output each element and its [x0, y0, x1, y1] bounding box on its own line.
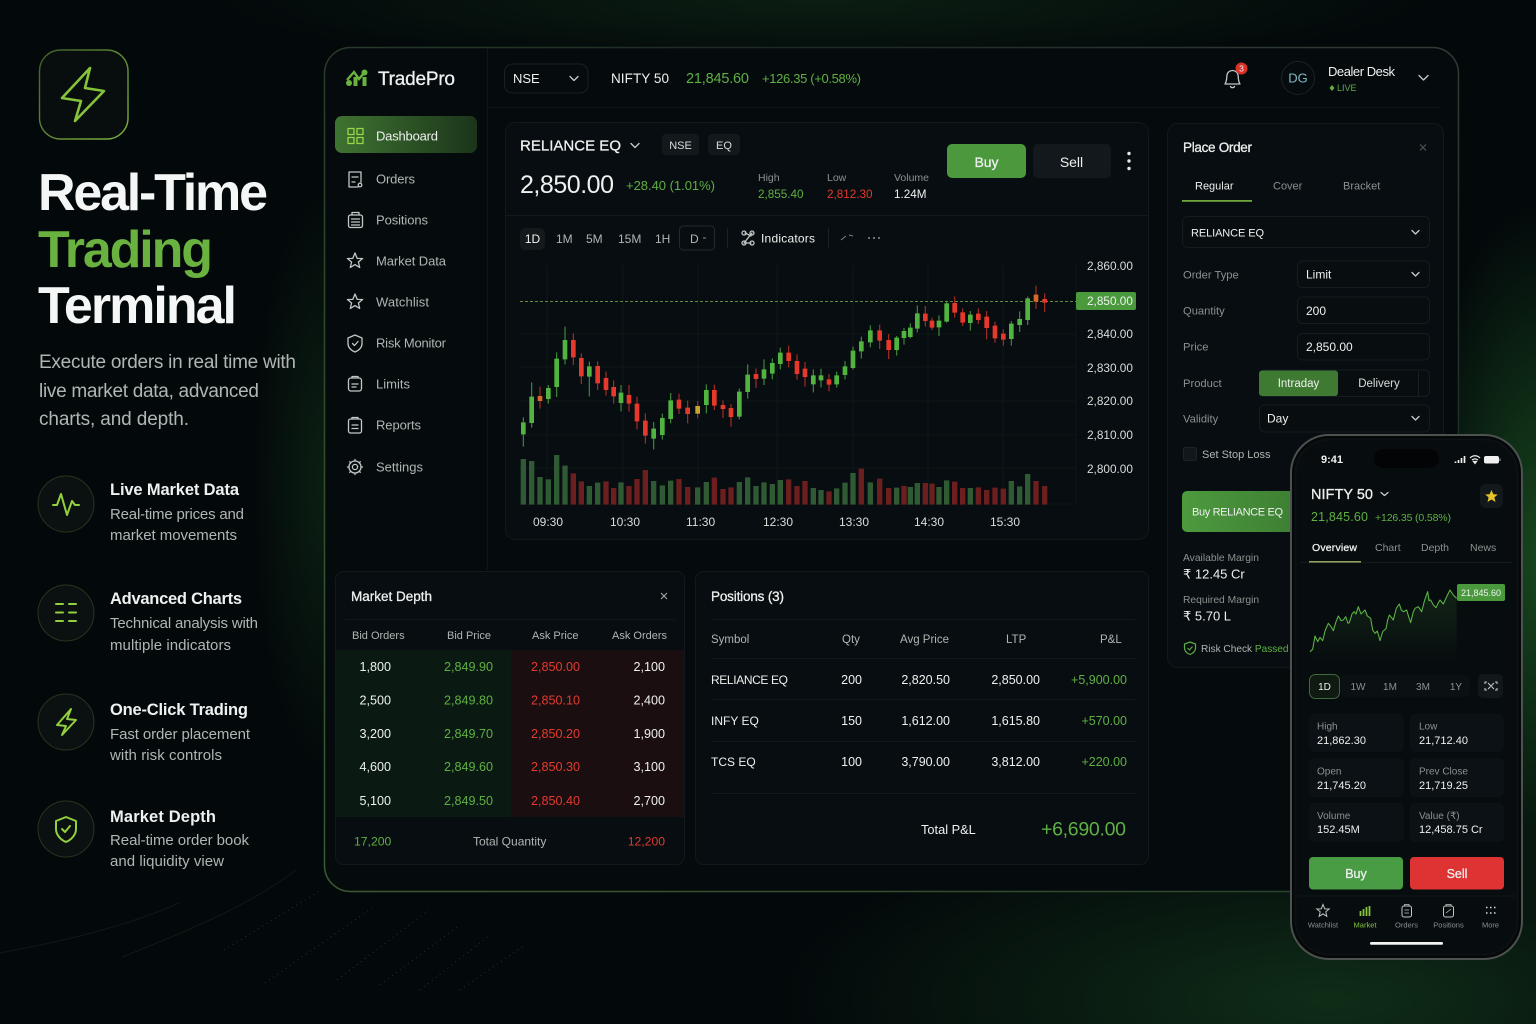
- phone index header: 21,845.60: [1311, 510, 1368, 524]
- index ticker: +126.35 (+0.58%): [762, 71, 861, 86]
- nav item: settings: Settings: [376, 460, 424, 474]
- index ticker: 21,845.60: [686, 71, 749, 87]
- positions column headers: Qty: [842, 634, 860, 646]
- sidebar navigation: [335, 116, 477, 474]
- stats: high low volume: 2,812.30: [827, 188, 873, 201]
- field: price: Price: [1183, 342, 1208, 354]
- title: Terminal: [38, 277, 237, 335]
- phone range selector: 1W: [1350, 682, 1366, 693]
- position: tcs: 100: [841, 755, 862, 769]
- icon: brand lightning bolt badge: [40, 50, 128, 139]
- time axis: 14:30: [914, 515, 944, 529]
- depth rows: [359, 660, 665, 808]
- position: reliance: [711, 673, 1127, 687]
- positions column headers: LTP: [1006, 634, 1027, 646]
- index ticker: NIFTY 50: [611, 71, 669, 86]
- position: infy: [711, 714, 1127, 728]
- order tabs: [1182, 180, 1380, 202]
- feature: market depth: Market Depth: [110, 808, 216, 826]
- nav item: positions: Positions: [376, 212, 428, 228]
- phone bottom navigation: Watchlist: [1308, 920, 1339, 930]
- depth rows: 1,900: [633, 727, 665, 741]
- depth rows: 2,850.00: [531, 660, 580, 674]
- nav item: market data: Market Data: [376, 254, 447, 268]
- total p&l: +6,690.00: [1041, 818, 1126, 840]
- nav item: limits: [348, 376, 410, 392]
- field: product toggle: Product: [1183, 378, 1222, 390]
- phone tabs: Chart: [1375, 542, 1401, 554]
- depth rows: 2,849.80: [444, 694, 493, 708]
- time axis: 15:30: [990, 515, 1020, 529]
- depth rows: 2,100: [633, 660, 665, 674]
- nav item: risk monitor: [348, 335, 447, 352]
- phone range selector: [1310, 674, 1503, 698]
- feature: market depth: [38, 801, 250, 870]
- order tabs: Cover: [1273, 180, 1303, 192]
- price axis: [1076, 259, 1136, 476]
- phone bottom navigation: More: [1482, 920, 1499, 930]
- nav item: orders: Orders: [376, 172, 416, 186]
- position: reliance: 2,850.00: [991, 673, 1040, 687]
- feature: one-click trading: [38, 694, 251, 764]
- candles: [523, 286, 1045, 449]
- phone tabs: News: [1470, 542, 1496, 554]
- positions column headers: P&L: [1100, 634, 1122, 646]
- chart toolbar: 1M: [556, 232, 573, 246]
- position: tcs: TCS EQ: [711, 755, 756, 769]
- price axis: 2,830.00: [1087, 361, 1133, 375]
- nav item: dashboard active: Dashboard: [376, 128, 438, 144]
- position: reliance: 2,820.50: [901, 673, 950, 687]
- buy sell buttons: Buy: [974, 154, 999, 170]
- buy order button: [1182, 491, 1307, 532]
- phone index header: NIFTY 50: [1311, 487, 1373, 503]
- time axis: 13:30: [839, 515, 869, 529]
- stats: high low volume: Low: [827, 172, 847, 184]
- volume bars: [523, 455, 1045, 505]
- positions column headers: Avg Price: [900, 634, 949, 646]
- feature: live market data: market movements: [110, 527, 237, 544]
- depth column headers: [352, 630, 668, 642]
- position: reliance: +5,900.00: [1071, 673, 1127, 687]
- positions column headers: [711, 634, 1122, 646]
- set stop loss checkbox: [1184, 448, 1271, 461]
- nav item: orders: [349, 172, 416, 187]
- stats: high low volume: Volume: [894, 172, 929, 184]
- instrument header: EQ: [716, 140, 732, 152]
- depth rows: 1,800: [359, 660, 391, 674]
- depth column headers: Bid Orders: [352, 630, 405, 642]
- phone stats grid: [1309, 714, 1504, 842]
- feature: live market data: Real-time prices and: [110, 506, 244, 523]
- feature: one-click trading: with risk controls: [109, 747, 222, 764]
- field: product toggle: Delivery: [1358, 378, 1400, 390]
- price axis: 2,820.00: [1087, 394, 1133, 408]
- phone range selector: 1M: [1383, 682, 1397, 693]
- nav item: positions: [348, 212, 428, 228]
- stats: high low volume: 2,855.40: [758, 188, 804, 201]
- feature: market depth: and liquidity view: [110, 853, 224, 870]
- stats: high low volume: High: [758, 172, 780, 184]
- set stop loss checkbox: Set Stop Loss: [1202, 449, 1271, 461]
- status bar: 9:41: [1321, 454, 1343, 466]
- field: quantity: 200: [1306, 304, 1326, 318]
- field: price: [1183, 334, 1430, 360]
- phone range selector: 1Y: [1450, 682, 1462, 693]
- phone index header: +126.35 (0.58%): [1375, 512, 1451, 524]
- field: validity: Day: [1267, 412, 1288, 426]
- phone stats grid: Open: [1317, 766, 1341, 778]
- exchange selector: [504, 64, 588, 93]
- phone tabs: [1300, 542, 1512, 563]
- position: infy: 150: [841, 714, 862, 728]
- position: tcs: [711, 755, 1127, 769]
- user profile: DG: [1288, 70, 1308, 86]
- phone line chart: 21,845.60: [1461, 588, 1501, 598]
- subtitle text: Execute orders in real time with: [39, 352, 296, 373]
- depth column headers: Bid Price: [447, 630, 491, 642]
- subtitle text: charts, and depth.: [39, 409, 189, 430]
- field: price: 2,850.00: [1306, 340, 1353, 354]
- nav item: settings: [348, 460, 424, 474]
- price axis: 2,800.00: [1087, 462, 1133, 476]
- phone bottom navigation: Market: [1354, 920, 1377, 930]
- margin info: ₹ 12.45 Cr: [1183, 566, 1245, 582]
- user profile: [1282, 62, 1428, 94]
- phone buy sell buttons: Sell: [1447, 867, 1467, 881]
- depth rows: 2,849.60: [444, 760, 493, 774]
- depth rows: 5,100: [359, 794, 391, 808]
- position: tcs: 3,790.00: [901, 755, 950, 769]
- total p&l: Total P&L: [921, 822, 976, 837]
- nav item: dashboard active: [335, 116, 477, 153]
- total p&l: [921, 818, 1126, 840]
- phone buy sell buttons: Buy: [1345, 867, 1368, 881]
- depth rows: 2,850.20: [531, 727, 580, 741]
- instrument header: [520, 134, 740, 199]
- phone stats grid: 21,745.20: [1317, 780, 1366, 792]
- chart toolbar: D: [690, 232, 699, 246]
- price axis: 2,860.00: [1087, 259, 1133, 273]
- buy order button: Buy RELIANCE EQ: [1192, 506, 1283, 518]
- stats: high low volume: [758, 172, 929, 201]
- phone stats grid: Volume: [1317, 811, 1351, 822]
- depth rows: 2,850.30: [531, 760, 580, 774]
- nav item: market data: [347, 253, 447, 268]
- position: tcs: +220.00: [1081, 755, 1127, 769]
- chart toolbar: Indicators: [761, 232, 815, 246]
- phone range selector: 1D: [1318, 682, 1331, 693]
- phone stats grid: 12,458.75 Cr: [1419, 824, 1483, 836]
- chart toolbar: 5M: [586, 232, 603, 246]
- price axis: 2,850.00: [1087, 294, 1133, 308]
- phone stats grid: Value (₹): [1419, 811, 1460, 822]
- instrument header: +28.40 (1.01%): [626, 178, 715, 193]
- buy sell buttons: Sell: [1060, 154, 1083, 170]
- phone bottom navigation: Orders: [1395, 920, 1418, 930]
- nav item: reports: Reports: [376, 418, 422, 432]
- index ticker: [611, 71, 861, 87]
- instrument header: 2,850.00: [520, 171, 614, 199]
- nav item: watchlist: Watchlist: [376, 294, 429, 310]
- position: infy: 1,615.80: [991, 714, 1040, 728]
- candlestick chart: [520, 265, 1076, 505]
- top bar: [504, 62, 1428, 94]
- status bar: [1321, 449, 1500, 468]
- phone mockup: [1291, 435, 1522, 959]
- chart toolbar: 1D: [525, 232, 541, 246]
- margin info: [1183, 553, 1259, 624]
- phone stats grid: 152.45M: [1317, 824, 1360, 836]
- depth rows: 4,600: [359, 760, 391, 774]
- field: order type: [1183, 261, 1430, 288]
- panel: positions: Positions (3): [711, 589, 784, 604]
- feature: market depth: Real-time order book: [110, 832, 250, 849]
- phone line chart: [1310, 584, 1505, 663]
- exchange selector: NSE: [513, 71, 540, 86]
- user profile: Dealer Desk: [1328, 64, 1396, 79]
- positions column headers: Symbol: [711, 634, 749, 646]
- panel: place order: Place Order: [1183, 140, 1252, 155]
- depth totals: 12,200: [628, 834, 665, 848]
- phone stats grid: 21,719.25: [1419, 780, 1468, 792]
- depth rows: 2,849.70: [444, 727, 493, 741]
- feature: advanced charts: Advanced Charts: [110, 590, 242, 608]
- depth rows: 2,850.40: [531, 794, 580, 808]
- phone stats grid: 21,862.30: [1317, 735, 1366, 747]
- position: tcs: 3,812.00: [991, 755, 1040, 769]
- field: order type: Limit: [1306, 268, 1332, 282]
- field: quantity: Quantity: [1183, 306, 1225, 318]
- depth rows: 2,849.50: [444, 794, 493, 808]
- feature: one-click trading: Fast order placement: [110, 726, 251, 743]
- logo: TradePro: TradePro: [378, 69, 455, 90]
- panel: market depth: [336, 572, 684, 864]
- panel: instrument chart: [506, 122, 1148, 540]
- title: [38, 164, 268, 335]
- chart toolbar: 15M: [618, 232, 641, 246]
- subtitle text: live market data, advanced: [39, 381, 259, 402]
- chart toolbar: 1H: [655, 232, 670, 246]
- depth rows: 2,400: [633, 694, 665, 708]
- panel: trading terminal window: [324, 48, 1458, 892]
- depth rows: 2,500: [359, 694, 391, 708]
- field: quantity: [1183, 297, 1430, 324]
- panel: positions: [696, 572, 1148, 864]
- price axis: 2,810.00: [1087, 428, 1133, 442]
- order tabs: Bracket: [1343, 180, 1380, 192]
- field: order type: Order Type: [1183, 270, 1239, 282]
- depth rows: 2,700: [633, 794, 665, 808]
- panel: market depth: Market Depth: [351, 589, 432, 604]
- time axis: 11:30: [686, 515, 715, 529]
- position: reliance: RELIANCE EQ: [711, 673, 788, 687]
- icon: notification bell: 3: [1239, 64, 1244, 74]
- subtitle text: [39, 352, 296, 430]
- position: reliance: 200: [841, 673, 862, 687]
- depth rows: 3,200: [359, 727, 391, 741]
- phone range selector: 3M: [1416, 682, 1430, 693]
- field: product toggle: [1183, 370, 1430, 396]
- position: infy: INFY EQ: [711, 714, 759, 728]
- time axis: 12:30: [763, 515, 793, 529]
- time axis: [533, 515, 1020, 529]
- position: infy: 1,612.00: [901, 714, 950, 728]
- phone buy sell buttons: [1309, 857, 1504, 890]
- depth totals: Total Quantity: [473, 834, 546, 848]
- phone bottom navigation: Positions: [1433, 920, 1464, 930]
- feature: one-click trading: One-Click Trading: [110, 701, 248, 719]
- instrument header: NSE: [669, 140, 692, 152]
- feature: advanced charts: Technical analysis with: [110, 615, 258, 632]
- order tabs: Regular: [1195, 180, 1234, 192]
- depth rows: 2,850.10: [531, 694, 580, 708]
- title: Real-Time: [38, 164, 268, 222]
- panel: place order: [1168, 124, 1444, 668]
- price axis: 2,840.00: [1087, 327, 1133, 341]
- nav item: risk monitor: Risk Monitor: [376, 336, 447, 350]
- risk check status: Risk Check Passed: [1201, 644, 1289, 655]
- phone stats grid: 21,712.40: [1419, 735, 1468, 747]
- stats: high low volume: 1.24M: [894, 188, 926, 201]
- field: validity: [1183, 405, 1430, 432]
- position: infy: +570.00: [1081, 714, 1127, 728]
- nav item: reports: [348, 418, 422, 433]
- phone index header: [1311, 484, 1503, 524]
- feature: live market data: [38, 476, 244, 544]
- field: validity: Validity: [1183, 414, 1219, 426]
- phone tabs: Depth: [1421, 542, 1449, 554]
- depth rows: 3,100: [633, 760, 665, 774]
- margin info: Available Margin: [1183, 553, 1259, 564]
- depth column headers: Ask Price: [532, 630, 578, 642]
- nav item: watchlist: [347, 294, 429, 310]
- depth rows: 2,849.90: [444, 660, 493, 674]
- icon: notification bell: [1225, 62, 1248, 88]
- chart toolbar: [520, 226, 880, 250]
- time axis: 10:30: [610, 515, 640, 529]
- phone stats grid: Prev Close: [1419, 766, 1468, 778]
- instrument header: RELIANCE EQ: [520, 138, 621, 154]
- buy sell buttons: [947, 144, 1131, 178]
- phone bottom navigation: [1298, 896, 1516, 945]
- phone stats grid: Low: [1419, 722, 1438, 732]
- instrument select: RELIANCE EQ: [1191, 228, 1264, 240]
- time axis: 09:30: [533, 515, 563, 529]
- depth column headers: Ask Orders: [612, 630, 668, 642]
- phone stats grid: High: [1317, 722, 1338, 732]
- instrument select: [1182, 216, 1430, 248]
- feature: live market data: Live Market Data: [110, 481, 240, 499]
- feature: advanced charts: multiple indicators: [110, 637, 231, 654]
- margin info: ₹ 5.70 L: [1183, 608, 1231, 624]
- user profile: LIVE: [1337, 83, 1357, 93]
- depth totals: 17,200: [354, 834, 391, 848]
- margin info: Required Margin: [1183, 595, 1259, 606]
- depth totals: [354, 834, 665, 848]
- field: product toggle: Intraday: [1278, 378, 1320, 390]
- phone tabs: Overview: [1312, 542, 1357, 554]
- title: Trading: [38, 221, 213, 279]
- feature: advanced charts: [38, 585, 258, 654]
- nav item: limits: Limits: [376, 376, 410, 392]
